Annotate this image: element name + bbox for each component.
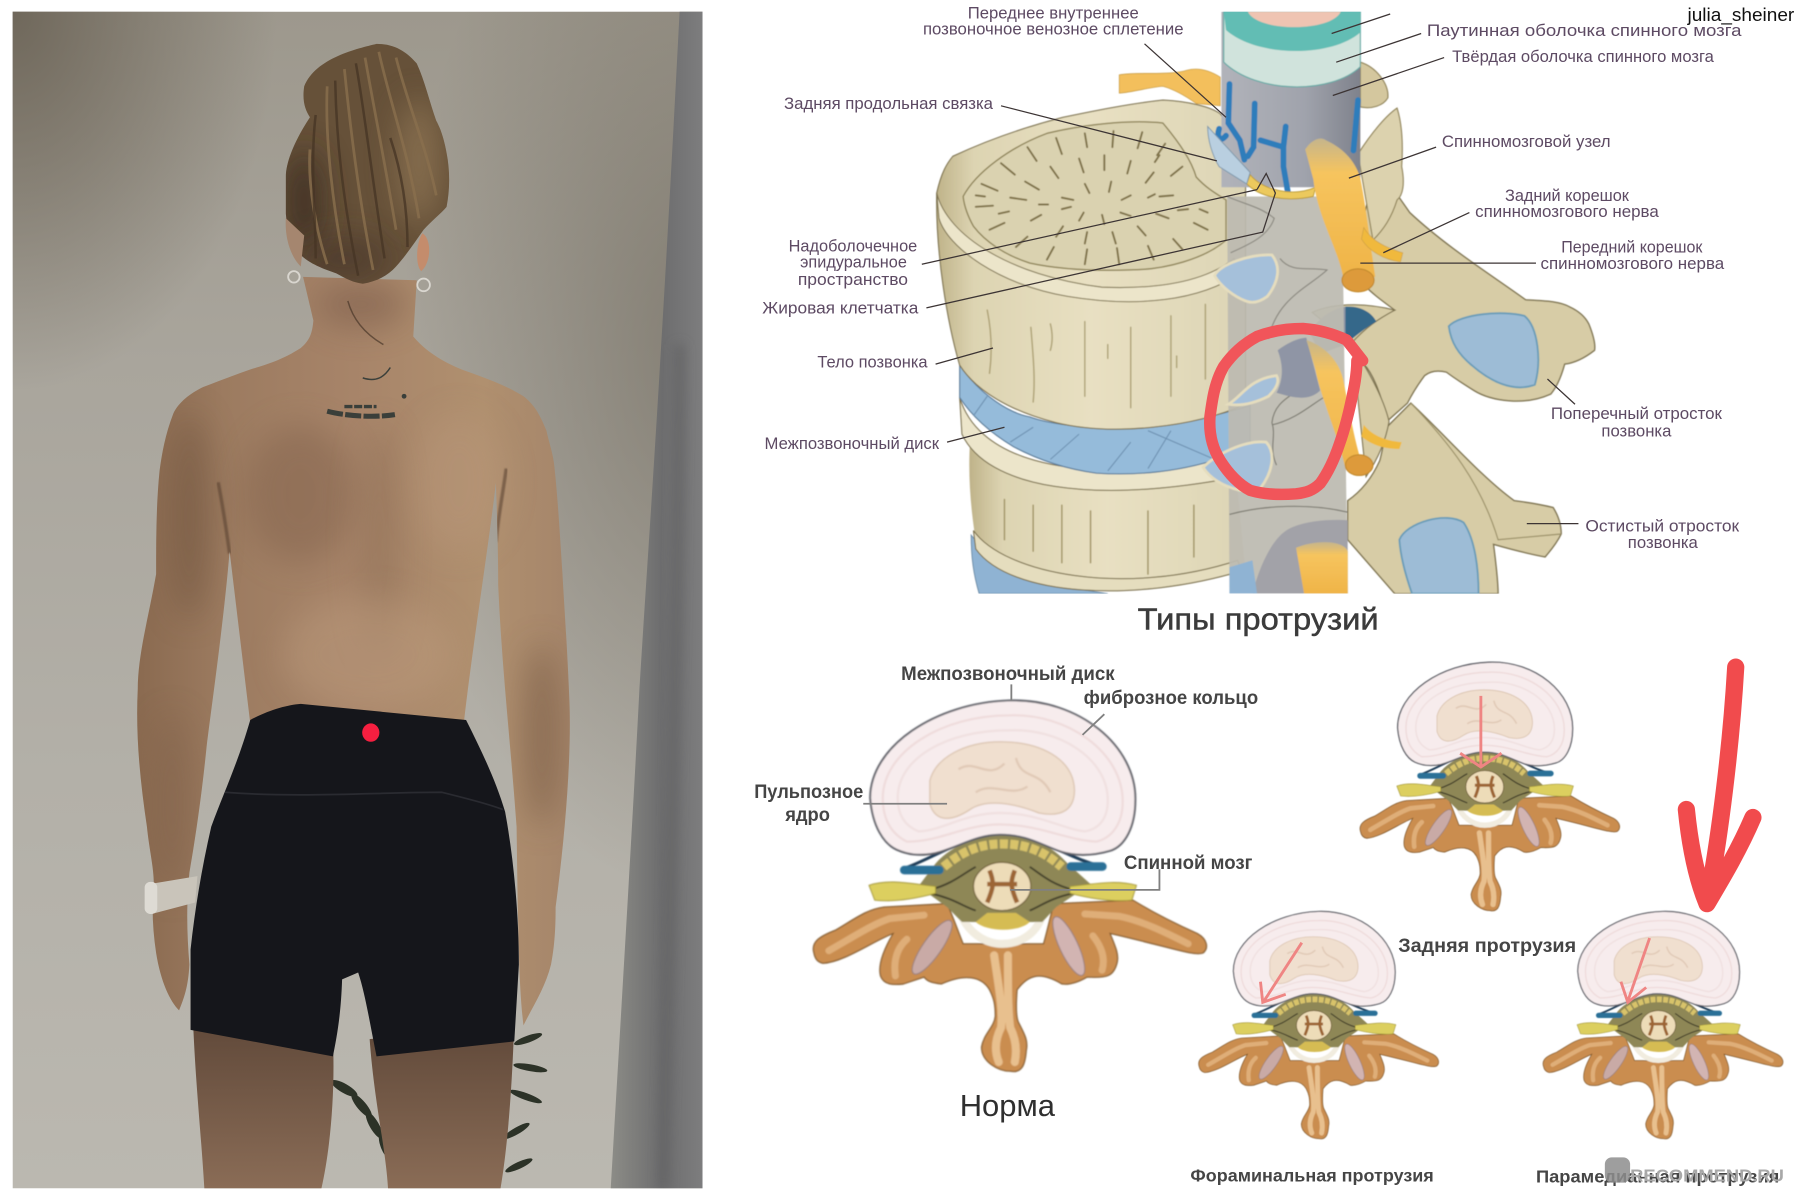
- torso and arms: [137, 277, 570, 1025]
- protrusion labels: [1190, 936, 1779, 1187]
- anatomy labels: Жировая клетчатка: [762, 299, 919, 318]
- username: julia_sheiner: [1686, 4, 1794, 26]
- wall: [12, 12, 703, 1188]
- anatomy labels: позвонка: [1601, 421, 1672, 440]
- watermark: RECOMMEND.RU: [1630, 1165, 1784, 1185]
- upper vertebral body: [937, 100, 1246, 429]
- anatomy labels: Межпозвоночный диск: [765, 434, 940, 453]
- red arrow pointing to paramedian protrusion: [1686, 667, 1753, 904]
- anatomy labels: Спинномозговой узел: [1442, 132, 1611, 151]
- anatomy labels: [762, 4, 1742, 552]
- body shading: [152, 281, 560, 896]
- yellow left root: [1119, 69, 1220, 106]
- anatomy labels: Тело позвонка: [817, 353, 928, 372]
- anatomy labels: Передний корешок: [1561, 238, 1703, 257]
- red marker dot: [362, 723, 379, 742]
- pink arrow: [1260, 943, 1302, 1002]
- anatomy labels: Паутинная оболочка спинного мозга: [1427, 21, 1742, 40]
- anatomy labels: эпидуральное: [800, 253, 907, 272]
- disc fibres: [973, 396, 1215, 471]
- anatomy labels: спинномозгового нерва: [1541, 254, 1725, 273]
- red circle highlight: [1210, 329, 1363, 494]
- normal disc labels: Межпозвоночный диск: [901, 664, 1115, 685]
- anatomy labels: позвоночное венозное сплетение: [923, 20, 1184, 39]
- diagram: foraminal protrusion: [1199, 911, 1439, 1139]
- anatomy labels: Надоболочечное: [789, 237, 917, 256]
- normal disc labels: Пульпозное: [754, 782, 863, 803]
- normal disc labels: [754, 664, 1258, 874]
- panel: spine anatomy: [762, 4, 1742, 594]
- normal disc labels: Спинной мозг: [1124, 853, 1253, 874]
- norm label: Норма: [960, 1088, 1056, 1123]
- epidural fat and ligament: [1208, 126, 1316, 199]
- hair: [286, 44, 449, 345]
- diagram: paramedian protrusion: [1543, 911, 1783, 1139]
- spongy bone: [963, 122, 1226, 270]
- legs: [193, 1016, 514, 1188]
- watch: [145, 876, 197, 914]
- curtain: [611, 12, 703, 1188]
- veins: [1218, 84, 1358, 193]
- anatomy labels: Остистый отросток: [1585, 517, 1740, 536]
- shorts: [191, 704, 519, 1056]
- normal disc labels: фиброзное кольцо: [1084, 688, 1258, 709]
- leader lines: [922, 14, 1578, 524]
- watermark: [1605, 1157, 1784, 1185]
- disc: [960, 365, 1250, 474]
- diagram: normal disc: [754, 664, 1258, 1123]
- anatomy labels: Задняя продольная связка: [784, 94, 994, 113]
- lower vertebral body: [960, 397, 1246, 594]
- anatomy labels: Поперечный отросток: [1551, 404, 1723, 423]
- anatomy labels: позвонка: [1628, 533, 1699, 552]
- facets: [1203, 255, 1278, 490]
- anatomy labels: Переднее внутреннее: [968, 4, 1139, 23]
- protrusion labels: Фораминальная протрузия: [1190, 1165, 1434, 1185]
- normal disc labels: ядро: [784, 805, 830, 826]
- anatomy labels: спинномозгового нерва: [1475, 202, 1660, 221]
- nerve roots: [1296, 138, 1403, 594]
- dura mater: [1221, 12, 1360, 187]
- callout lines: [863, 684, 1159, 890]
- protrusion labels: Парамедианная протрузия: [1536, 1167, 1779, 1187]
- diagram: posterior protrusion: [1360, 662, 1620, 911]
- protrusion labels: Задняя протрузия: [1398, 936, 1576, 957]
- canal column: [1227, 196, 1348, 594]
- pink arrow: [1460, 696, 1502, 767]
- anatomy labels: пространство: [798, 270, 908, 289]
- panel: back photo: [12, 12, 703, 1188]
- plant: [329, 1031, 548, 1175]
- earrings: [288, 271, 430, 291]
- tattoo: [327, 368, 406, 416]
- pink arrow: [1621, 938, 1650, 1002]
- anatomy labels: Твёрдая оболочка спинного мозга: [1452, 47, 1715, 66]
- title: types of protrusions: Типы протрузий: [1138, 601, 1379, 636]
- anatomy labels: Задний корешок: [1505, 186, 1630, 205]
- right processes: [1310, 62, 1595, 594]
